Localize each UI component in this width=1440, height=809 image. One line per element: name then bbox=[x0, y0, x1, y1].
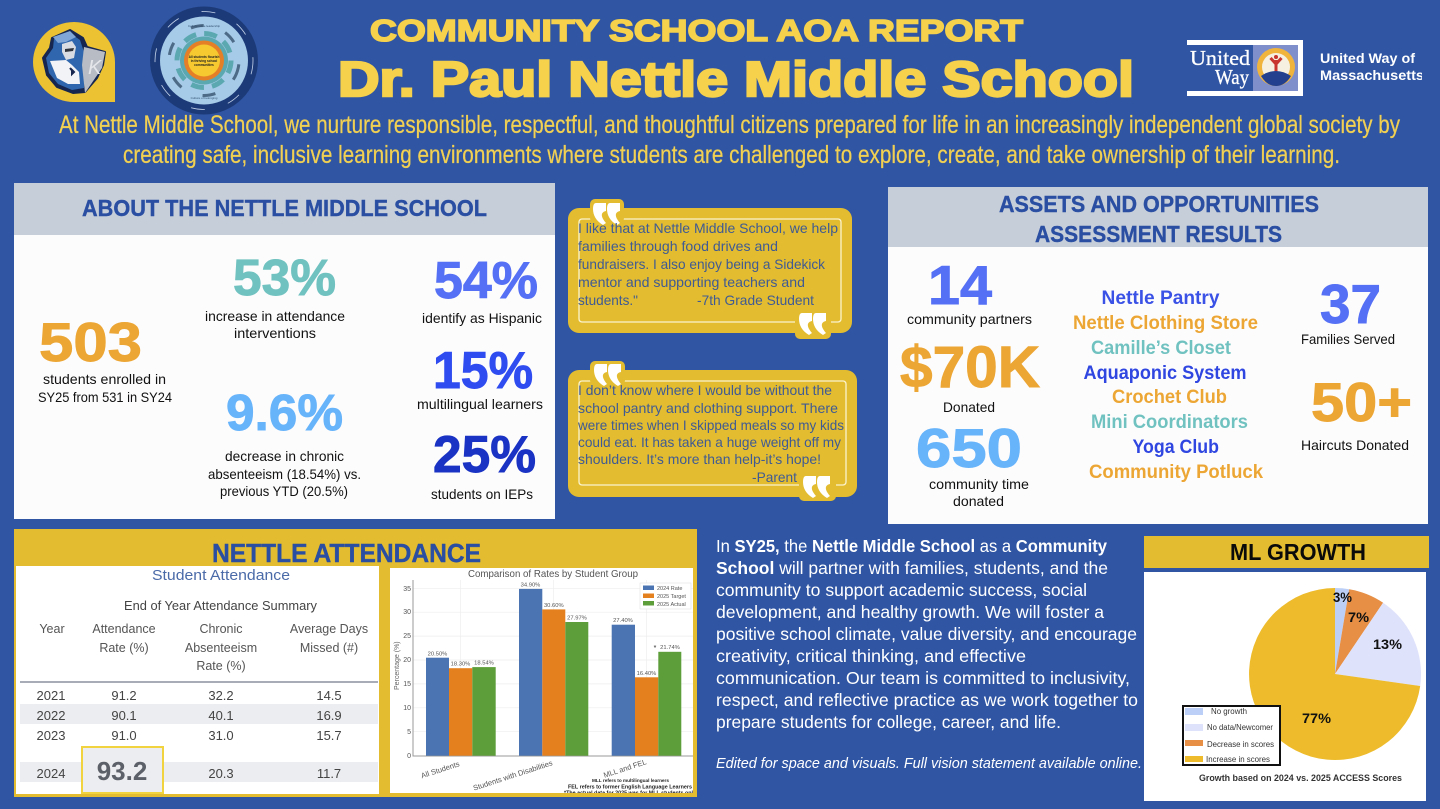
text: parent quote: were times when I skipped meals so my kids bbox=[577, 417, 844, 433]
chart footnotes: *The actual data for 2025 was for MLL students onl bbox=[564, 790, 693, 796]
chart: comparison of rates by student group: 18.30% bbox=[451, 662, 470, 668]
table: student attendance: End of Year Attendance Summary bbox=[124, 598, 317, 613]
panel: about the Nettle Middle School bbox=[14, 183, 555, 519]
text: parent quote: I don’t know where I would be without the bbox=[578, 382, 832, 398]
chart: comparison of rates by student group: 5 bbox=[407, 729, 411, 736]
chart: comparison of rates by student group: 0 bbox=[407, 753, 411, 760]
chart: comparison of rates by student group: 30.60% bbox=[544, 603, 564, 609]
icon: open quote bbox=[594, 364, 621, 386]
panel: Nettle attendance bbox=[14, 529, 697, 797]
heading: assets: ASSESSMENT RESULTS bbox=[1035, 221, 1282, 247]
callout: parent quote bbox=[568, 361, 857, 501]
title: COMMUNITY SCHOOL AOA REPORT bbox=[370, 13, 1023, 48]
stat: 53% attendance interventions: 53% bbox=[233, 249, 336, 306]
table: student attendance: Attendance bbox=[92, 622, 156, 636]
pie chart: 13% bbox=[1373, 636, 1403, 652]
table: student attendance: 32.2 bbox=[208, 688, 234, 703]
text block: community school vision: development, and healthy growth. We will foster a bbox=[716, 602, 1104, 622]
list of assets: Yoga Club bbox=[1132, 437, 1219, 458]
text block: community school vision bbox=[716, 536, 1138, 732]
stat: 503 students bbox=[38, 311, 172, 405]
stat: 50+ haircuts bbox=[1301, 371, 1412, 453]
stat: 14 partners: 14 bbox=[928, 254, 992, 316]
title bbox=[338, 13, 1134, 107]
icon: knight mascot badge: K bbox=[88, 57, 103, 79]
stat: 25% IEPs: 25% bbox=[433, 426, 536, 484]
chart: comparison of rates by student group: 35 bbox=[403, 586, 411, 593]
table: student attendance: Student Attendance bbox=[152, 567, 290, 584]
heading: assets: ASSETS AND OPPORTUNITIES bbox=[999, 191, 1319, 217]
table: student attendance: 91.0 bbox=[111, 728, 137, 743]
stat: 50+ haircuts: 50+ bbox=[1311, 371, 1412, 433]
stat: 650 community time: community time bbox=[929, 476, 1029, 492]
icon: community schools circular framework: All students flourish bbox=[189, 55, 219, 59]
chart: comparison of rates by student group: 25 bbox=[403, 633, 411, 640]
table: student attendance: Absenteeism bbox=[185, 641, 257, 655]
table: student attendance: Missed (#) bbox=[300, 641, 358, 655]
text: student quote: mentor and supporting teachers and bbox=[578, 274, 805, 290]
chart: comparison of rates by student group: 16.40% bbox=[637, 671, 656, 677]
icon: United Way logo: United bbox=[1190, 46, 1251, 70]
list of assets: Nettle Pantry bbox=[1102, 288, 1220, 309]
stat: 37 families: 37 bbox=[1320, 273, 1381, 335]
icon: community schools circular framework: Culture of belonging bbox=[191, 96, 218, 100]
icon: United Way logo: Way bbox=[1215, 65, 1249, 89]
chart: comparison of rates by student group: 30 bbox=[403, 609, 411, 616]
mission statement bbox=[59, 111, 1400, 169]
stat: 14 partners: community partners bbox=[907, 311, 1032, 327]
table: student attendance: 31.0 bbox=[208, 728, 234, 743]
text block: community school vision: respect, and reflective practice as we work together to bbox=[716, 690, 1138, 710]
chart: comparison of rates by student group: Comparison of Rates by Student Group bbox=[468, 568, 638, 580]
chart: comparison of rates by student group: 20 bbox=[403, 657, 411, 664]
list of assets: Aquaponic System bbox=[1084, 363, 1246, 384]
stat: 54% Hispanic: identify as Hispanic bbox=[422, 310, 542, 326]
table: student attendance: Year bbox=[39, 622, 65, 636]
table: student attendance: 2022 bbox=[37, 708, 65, 723]
table: student attendance: 90.1 bbox=[111, 708, 137, 723]
text block: community school vision: communication. Our team is committed to inclusivity, bbox=[716, 668, 1130, 688]
chart footnotes: MLL refers to multilingual learners bbox=[592, 778, 670, 783]
table: student attendance: Rate (%) bbox=[196, 659, 246, 673]
stat: 14 partners bbox=[907, 254, 1032, 327]
list of assets bbox=[1073, 288, 1263, 483]
stat: 503 students: students enrolled in bbox=[43, 371, 166, 387]
stat: 9.6% chronic absenteeism bbox=[208, 384, 361, 499]
heading: attendance: NETTLE ATTENDANCE bbox=[212, 538, 481, 568]
text: parent quote: -Parent bbox=[752, 469, 797, 485]
text: parent quote bbox=[577, 382, 844, 485]
text: student quote: families through food drives and bbox=[578, 238, 778, 254]
chart: comparison of rates by student group: * bbox=[654, 645, 657, 652]
chart: comparison of rates by student group: 18.54% bbox=[474, 660, 494, 666]
stat: 50+ haircuts: Haircuts Donated bbox=[1301, 437, 1409, 453]
stat: 650 community time: donated bbox=[953, 493, 1004, 509]
table: student attendance bbox=[16, 566, 379, 794]
pie chart bbox=[1249, 588, 1421, 760]
table: student attendance: Chronic bbox=[199, 622, 243, 636]
panel: assets and opportunities bbox=[888, 187, 1428, 524]
chart: comparison of rates by student group: 27.40% bbox=[613, 618, 633, 624]
stat: 37 families: Families Served bbox=[1301, 331, 1395, 347]
panel: ML growth pie chart bbox=[1144, 572, 1426, 801]
stat: 503 students: 503 bbox=[39, 311, 142, 373]
bars: students with disabilities bbox=[519, 589, 588, 756]
text block: community school vision: prepare students for college, career, and life. bbox=[716, 712, 1061, 732]
text block: community school vision: community to support academic success, social bbox=[716, 580, 1087, 600]
pie legend: Decrease in scores bbox=[1207, 740, 1274, 749]
note: edited for space: Edited for space and visuals. Full vision statement available online. bbox=[716, 756, 1142, 772]
pie legend: No data/Newcomer bbox=[1207, 723, 1273, 732]
text: student quote: -7th Grade Student bbox=[697, 292, 814, 308]
stat: 15% multilingual: multilingual learners bbox=[417, 396, 543, 412]
icon: open quote bbox=[593, 203, 620, 225]
stat: 503 students: SY25 from 531 in SY24 bbox=[38, 389, 172, 405]
text: parent quote: could eat. It has taken a huge weight off my bbox=[578, 434, 841, 450]
highlight: 2024 attendance rate bbox=[82, 747, 163, 793]
chart: comparison of rates by student group: Percentage (%) bbox=[394, 641, 401, 690]
text: student quote: I like that at Nettle Middle School, we help bbox=[578, 220, 838, 236]
chart: comparison of rates by student group: MLL and FEL bbox=[602, 757, 648, 780]
icon: community schools circular framework: in thriving school bbox=[191, 59, 217, 63]
heading: ML growth bbox=[1144, 536, 1429, 568]
pie chart: 3% bbox=[1333, 589, 1353, 605]
pie chart: 77% bbox=[1302, 710, 1332, 726]
list of assets: Camille’s Closet bbox=[1091, 338, 1232, 359]
pie legend bbox=[1183, 706, 1280, 765]
text block: community school vision: School will partner with families, students, and the bbox=[716, 558, 1108, 578]
chart: comparison of rates by student group bbox=[390, 568, 693, 796]
stat: 9.6% chronic absenteeism: decrease in chronic bbox=[225, 448, 344, 464]
table: student attendance: 15.7 bbox=[316, 728, 342, 743]
chart legend: 2024 Rate bbox=[657, 586, 682, 592]
chart footnotes: FEL refers to former English Language Learners bbox=[568, 784, 692, 790]
stat: 53% attendance interventions: interventions bbox=[234, 325, 316, 341]
icon: community schools circular framework: communities bbox=[194, 63, 214, 67]
stat: 37 families bbox=[1301, 273, 1395, 347]
icon: knight mascot badge bbox=[33, 22, 115, 102]
table: student attendance: 16.9 bbox=[316, 708, 342, 723]
title: Dr. Paul Nettle Middle School bbox=[338, 53, 1134, 107]
text: United Way of Massachusetts bbox=[1320, 53, 1422, 80]
stat: 650 community time: 650 bbox=[916, 417, 1022, 479]
bars: all students bbox=[426, 658, 496, 756]
chart: comparison of rates by student group: All Students bbox=[420, 759, 461, 780]
stat: 9.6% chronic absenteeism: previous YTD (20.5%) bbox=[220, 483, 348, 499]
stat: 54% Hispanic bbox=[422, 252, 542, 326]
stat: 9.6% chronic absenteeism: absenteeism (18.54%) vs. bbox=[208, 466, 361, 482]
stat: 9.6% chronic absenteeism: 9.6% bbox=[226, 384, 343, 441]
stat: 15% multilingual bbox=[417, 342, 543, 412]
chart footnotes bbox=[564, 778, 693, 793]
table: student attendance: Rate (%) bbox=[99, 641, 149, 655]
stat: 15% multilingual: 15% bbox=[433, 342, 533, 400]
chart: comparison of rates by student group: 21.74% bbox=[660, 645, 680, 651]
text: United Way of Massachusetts: Massachusetts bbox=[1320, 67, 1424, 83]
table: student attendance: 2024 bbox=[37, 766, 65, 781]
text: student quote bbox=[578, 220, 838, 308]
icon: close quote bbox=[799, 313, 826, 335]
icon: community schools circular framework: Collaborative leadership bbox=[188, 24, 220, 28]
stat: 53% attendance interventions bbox=[205, 249, 345, 341]
text: parent quote: shoulders. It’s more than help-it’s hope! bbox=[578, 451, 821, 467]
list of assets: Mini Coordinators bbox=[1091, 412, 1248, 433]
chart legend bbox=[640, 583, 691, 609]
pie legend: Increase in scores bbox=[1206, 755, 1270, 764]
table: student attendance: 11.7 bbox=[317, 766, 341, 781]
bars: MLL and FEL bbox=[612, 625, 681, 756]
pie legend: No growth bbox=[1211, 707, 1247, 716]
stat: $70K donated: $70K bbox=[900, 335, 1040, 400]
heading: ML growth: ML GROWTH bbox=[1230, 539, 1366, 565]
icon: United Way logo bbox=[1187, 40, 1303, 96]
chart: comparison of rates by student group: 27.97% bbox=[567, 616, 587, 622]
pie chart: 7% bbox=[1348, 609, 1370, 625]
table: student attendance: 91.2 bbox=[111, 688, 137, 703]
table: student attendance: 20.3 bbox=[208, 766, 234, 781]
chart: comparison of rates by student group: 34.90% bbox=[521, 582, 540, 588]
highlight: 2024 attendance rate: 93.2 bbox=[97, 756, 147, 786]
chart: comparison of rates by student group: 15 bbox=[403, 681, 411, 688]
table: student attendance: Average Days bbox=[290, 622, 368, 636]
stat: 25% IEPs: students on IEPs bbox=[431, 486, 533, 502]
caption: pie: Growth based on 2024 vs. 2025 ACCESS Scores bbox=[1199, 773, 1402, 783]
stat: 650 community time bbox=[916, 417, 1029, 509]
text block: community school vision: creativity, critical thinking, and effective bbox=[716, 646, 1026, 666]
stat: $70K donated: Donated bbox=[943, 399, 995, 415]
stat: 53% attendance interventions: increase in attendance bbox=[205, 308, 345, 324]
chart legend: 2025 Target bbox=[657, 594, 686, 600]
list of assets: Community Potluck bbox=[1089, 462, 1263, 483]
table: student attendance: 2021 bbox=[37, 688, 65, 703]
icon: community schools circular framework bbox=[150, 6, 258, 114]
text: student quote: fundraisers. I also enjoy being a Sidekick bbox=[578, 256, 826, 272]
chart: comparison of rates by student group: 10 bbox=[403, 705, 411, 712]
table: student attendance: 40.1 bbox=[208, 708, 234, 723]
list of assets: Crochet Club bbox=[1112, 387, 1227, 408]
icon: close quote bbox=[803, 476, 830, 498]
text: student quote: students." bbox=[578, 292, 638, 308]
stat: 54% Hispanic: 54% bbox=[434, 252, 538, 310]
chart legend: 2025 Actual bbox=[657, 602, 686, 608]
chart: comparison of rates by student group: 20.50% bbox=[428, 652, 447, 658]
table: student attendance: 2023 bbox=[37, 728, 65, 743]
chart: comparison of rates by student group: Students with Disabilities bbox=[472, 758, 554, 793]
text: United Way of Massachusetts: United Way of bbox=[1320, 50, 1415, 66]
text: parent quote: school pantry and clothing support. There bbox=[578, 400, 838, 416]
table: student attendance: 14.5 bbox=[316, 688, 342, 703]
text block: community school vision: positive school climate, value diversity, and encourage bbox=[716, 624, 1137, 644]
heading: assets bbox=[999, 191, 1319, 247]
callout: student quote bbox=[568, 199, 852, 339]
list of assets: Nettle Clothing Store bbox=[1073, 313, 1258, 334]
heading: about: ABOUT THE NETTLE MIDDLE SCHOOL bbox=[82, 195, 487, 221]
text block: community school vision: In SY25, the Nettle Middle School as a Community bbox=[716, 536, 1107, 556]
